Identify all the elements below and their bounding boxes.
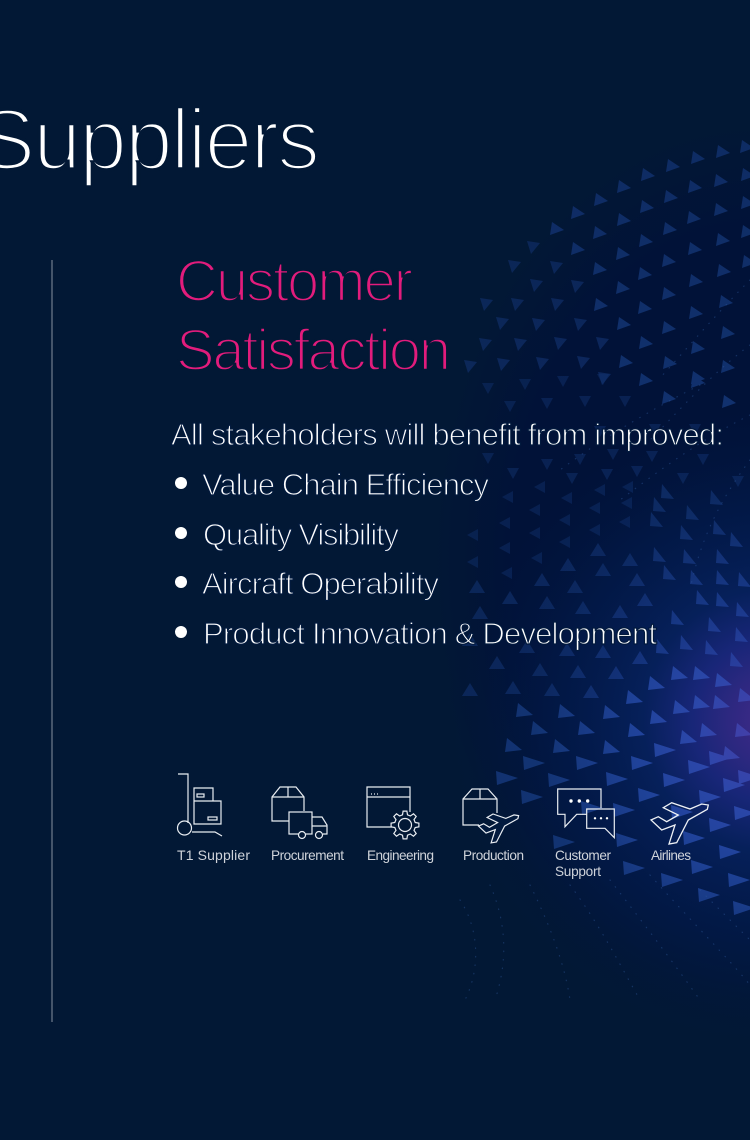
label: Procurement: Procurement bbox=[271, 848, 344, 863]
benefits list bbox=[175, 467, 657, 651]
heading: customer satisfaction: Satisfaction bbox=[176, 318, 451, 383]
label: Engineering: Engineering bbox=[367, 848, 434, 863]
icon: engineering window and gear bbox=[367, 787, 419, 839]
value chain icons bbox=[177, 774, 708, 879]
label: T1 Supplier: T1 Supplier bbox=[177, 847, 250, 863]
bullet 2: Quality Visibility bbox=[203, 517, 400, 552]
icon: production box and plane bbox=[463, 789, 519, 843]
icon: customer support chat bubbles bbox=[558, 789, 614, 838]
triangle field bbox=[462, 140, 750, 915]
icon: procurement box and truck bbox=[272, 787, 327, 838]
bullet 1: Value Chain Efficiency bbox=[202, 467, 490, 502]
label: Customer Support: Support bbox=[555, 864, 601, 879]
dotted wave lines bbox=[460, 280, 750, 1000]
bullet 4: Product Innovation & Development bbox=[203, 616, 657, 651]
bullet 3: Aircraft Operability bbox=[202, 566, 440, 601]
heading: customer satisfaction bbox=[176, 249, 451, 383]
label: Customer Support bbox=[555, 848, 611, 879]
label: Airlines: Airlines bbox=[651, 848, 691, 863]
icon: T1 supplier trolley bbox=[178, 774, 222, 836]
vertical divider line bbox=[52, 260, 53, 1022]
icon: airlines plane bbox=[651, 803, 708, 844]
heading: customer satisfaction: Customer bbox=[176, 249, 413, 314]
intro sentence: All stakeholders will benefit from improved: bbox=[171, 417, 724, 452]
label: Production: Production bbox=[463, 848, 524, 863]
label: Customer Support: Customer bbox=[555, 848, 611, 863]
